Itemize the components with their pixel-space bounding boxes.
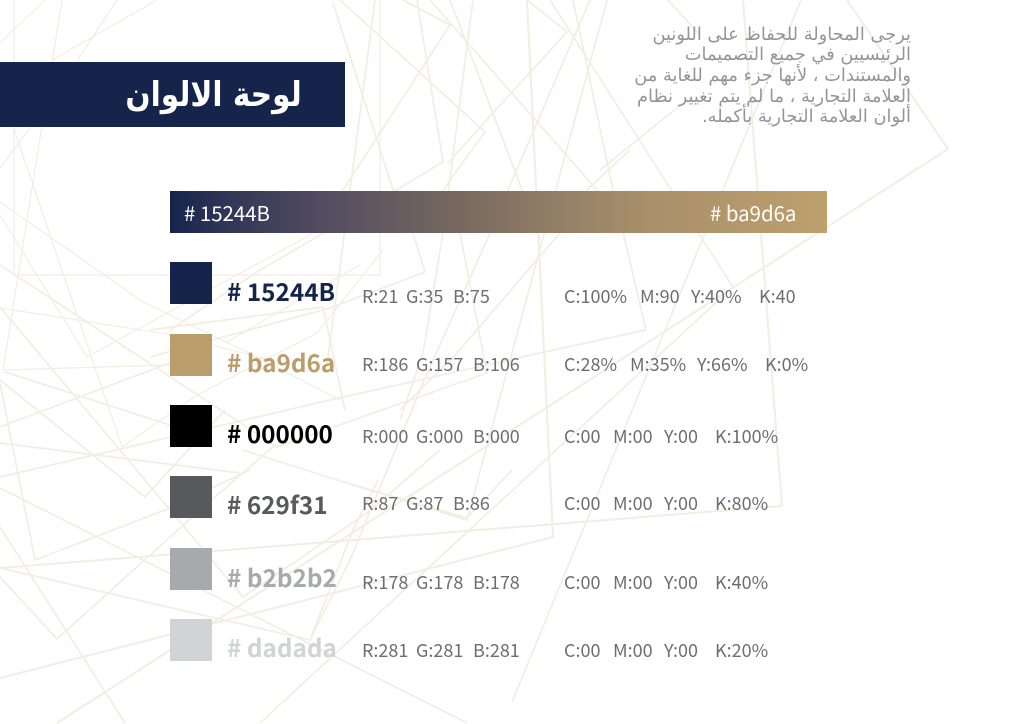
hex light grey: # dadada	[227, 629, 337, 664]
rgb navy: B:75	[453, 283, 490, 309]
hex dark grey: # 629f31	[227, 486, 328, 521]
swatch mid grey	[170, 548, 212, 590]
cmyk navy: Y:40%	[691, 283, 742, 309]
cmyk mid grey: Y:00	[664, 569, 698, 595]
rgb mid grey: B:178	[473, 569, 520, 595]
cmyk navy: K:40	[759, 283, 796, 309]
gradient bar	[170, 191, 827, 233]
cmyk dark grey: K:80%	[715, 490, 768, 516]
cmyk black: C:00	[564, 423, 600, 449]
cmyk black: Y:00	[664, 423, 698, 449]
cmyk dark grey: M:00	[613, 490, 653, 516]
gradient end label: # ba9d6a	[710, 197, 796, 227]
cmyk light grey: K:20%	[715, 637, 768, 663]
swatch navy	[170, 262, 212, 304]
cmyk light grey: Y:00	[664, 637, 698, 663]
swatch gold	[170, 334, 212, 376]
cmyk gold: Y:66%	[697, 351, 748, 377]
rgb dark grey: G:87	[406, 490, 443, 516]
cmyk dark grey	[564, 490, 768, 516]
rgb dark grey	[362, 490, 490, 516]
rgb mid grey: G:178	[416, 569, 463, 595]
cmyk gold: C:28%	[564, 351, 617, 377]
rgb dark grey: B:86	[453, 490, 490, 516]
rgb navy: G:35	[406, 283, 443, 309]
cmyk navy	[564, 283, 796, 309]
intro paragraph: يرجى المحاولة للحفاظ على اللونين	[652, 24, 911, 45]
intro paragraph: الرئيسيين في جميع التصميمات	[685, 44, 911, 65]
rgb mid grey	[362, 569, 520, 595]
cmyk mid grey	[564, 569, 768, 595]
cmyk light grey: M:00	[613, 637, 653, 663]
rgb navy: R:21	[362, 283, 398, 309]
rgb black: G:000	[416, 423, 463, 449]
cmyk black	[564, 423, 778, 449]
cmyk mid grey: C:00	[564, 569, 600, 595]
intro paragraph	[634, 24, 911, 127]
swatch dark grey	[170, 476, 212, 518]
cmyk light grey: C:00	[564, 637, 600, 663]
cmyk dark grey: Y:00	[664, 490, 698, 516]
rgb black: B:000	[473, 423, 520, 449]
rgb mid grey: R:178	[362, 569, 408, 595]
rgb light grey: R:281	[362, 637, 408, 663]
cmyk gold	[564, 351, 808, 377]
rgb black	[362, 423, 520, 449]
rgb gold: B:106	[473, 351, 520, 377]
cmyk mid grey: K:40%	[715, 569, 768, 595]
rgb light grey: G:281	[416, 637, 463, 663]
intro paragraph: العلامة التجارية ، ما لم يتم تغيير نظام	[637, 86, 911, 107]
cmyk dark grey: C:00	[564, 490, 600, 516]
rgb navy	[362, 283, 490, 309]
hex gold: # ba9d6a	[227, 344, 335, 379]
intro paragraph: ألوان العلامة التجارية بأكمله.	[702, 106, 911, 127]
swatch light grey	[170, 619, 212, 661]
cmyk mid grey: M:00	[613, 569, 653, 595]
hex mid grey: # b2b2b2	[227, 559, 337, 594]
gradient start label: # 15244B	[184, 197, 270, 227]
title text: لوحة الالوان	[126, 74, 302, 114]
hex black: # 000000	[227, 415, 333, 450]
rgb gold	[362, 351, 520, 377]
swatch black	[170, 405, 212, 447]
rgb gold: R:186	[362, 351, 408, 377]
cmyk gold: M:35%	[630, 351, 686, 377]
cmyk navy: C:100%	[564, 283, 627, 309]
rgb gold: G:157	[416, 351, 463, 377]
cmyk gold: K:0%	[765, 351, 808, 377]
hex navy: # 15244B	[227, 273, 335, 308]
title banner	[0, 62, 345, 127]
rgb dark grey: R:87	[362, 490, 398, 516]
cmyk black: M:00	[613, 423, 653, 449]
rgb light grey: B:281	[473, 637, 520, 663]
rgb black: R:000	[362, 423, 408, 449]
cmyk light grey	[564, 637, 768, 663]
cmyk black: K:100%	[715, 423, 778, 449]
intro paragraph: والمستندات ، لأنها جزء مهم للغاية من	[634, 65, 911, 86]
rgb light grey	[362, 637, 520, 663]
cmyk navy: M:90	[640, 283, 680, 309]
